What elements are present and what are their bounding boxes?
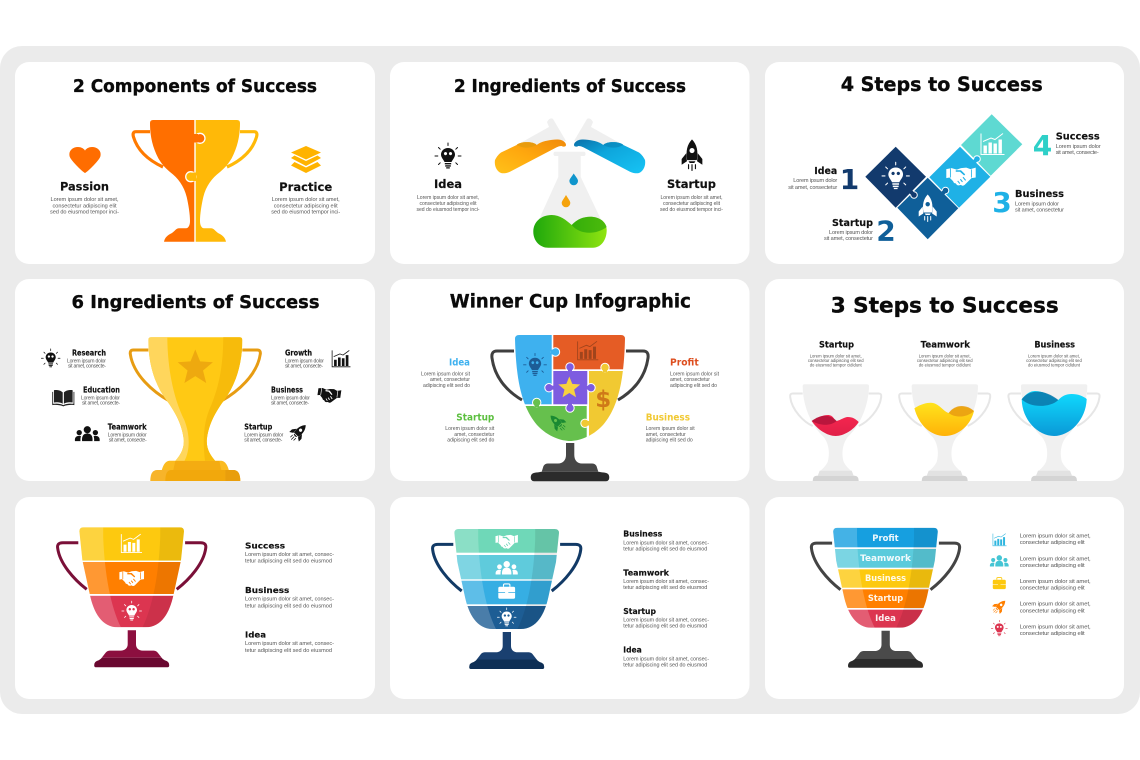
text block: Startup: Lorem ipsum dolor sit amet, bbox=[810, 353, 862, 358]
text block: Success: Lorem ipsum dolor bbox=[1056, 144, 1101, 150]
text block: Startup bbox=[808, 340, 864, 368]
text block: Growth: Growth bbox=[285, 349, 312, 358]
text block: Teamwork bbox=[917, 340, 973, 368]
text block: Teamwork: sit amet, consecte- bbox=[109, 438, 147, 444]
text block: Startup: consectetur adipiscing elit bbox=[663, 201, 721, 207]
text block: Business: tetur adipiscing elit sed do eiusmod bbox=[245, 603, 332, 609]
title: Winner Cup Infographic bbox=[450, 291, 691, 312]
text block: Startup: tetur adipiscing elit sed do eiusmod bbox=[623, 624, 707, 630]
band labels: Idea bbox=[875, 614, 896, 624]
step 3 diamond bbox=[929, 147, 990, 208]
text block: Idea: tetur adipiscing elit sed do eiusmod bbox=[245, 648, 332, 654]
band labels: Startup bbox=[868, 594, 904, 604]
text block: Success: sit amet, consecte- bbox=[1056, 150, 1099, 156]
text block: Startup: Startup bbox=[819, 340, 854, 350]
text block: Idea bbox=[788, 166, 837, 191]
text block: Research: Research bbox=[72, 349, 106, 358]
text block: Idea: adipiscing elit sed do bbox=[423, 383, 470, 389]
text block: Idea: Idea bbox=[814, 166, 837, 177]
text block: Practice bbox=[271, 180, 340, 216]
text list: Lorem ipsum dolor sit amet, bbox=[1020, 602, 1091, 608]
trophy: yellow, orange, red bands bbox=[58, 522, 206, 667]
text block: Business: Business bbox=[646, 413, 690, 424]
text block: Practice: sed do eiusmod tempor inci- bbox=[271, 210, 340, 216]
icon: rocket bbox=[919, 194, 937, 222]
text block: Business: Lorem ipsum dolor sit bbox=[646, 426, 695, 432]
text block: Business: Business bbox=[1034, 340, 1075, 350]
text block: Startup: Lorem ipsum dolor sit amet, bbox=[660, 195, 722, 201]
icon: briefcase bbox=[498, 584, 515, 599]
text block: Business: Business bbox=[245, 586, 290, 595]
text block: Startup: Startup bbox=[244, 422, 273, 431]
puzzle knobs bbox=[910, 156, 980, 198]
text block: Success: Lorem ipsum dolor sit amet, consec- bbox=[245, 552, 334, 558]
icon: bulb bbox=[524, 353, 546, 376]
panel: 3 Steps to Success bbox=[765, 279, 1124, 481]
text block: Startup: Lorem ipsum dolor sit amet, consec- bbox=[623, 618, 709, 624]
icon: rocket bbox=[990, 597, 1009, 616]
text block: Teamwork bbox=[623, 568, 709, 591]
icon: handshake bbox=[119, 571, 144, 586]
text block: Business bbox=[245, 586, 334, 609]
trophy: green, cyan, blue, navy bands bbox=[433, 524, 581, 669]
text block: Startup: do eiusmod tempor cididunt bbox=[810, 363, 863, 368]
text block: Growth: sit amet, consecte- bbox=[285, 364, 323, 370]
text block: Idea: sit amet, consectetur bbox=[788, 185, 837, 191]
text block: Practice: Practice bbox=[279, 180, 332, 194]
text block: Business: Lorem ipsum dolor bbox=[1015, 202, 1059, 208]
text block: Idea: Lorem ipsum dolor sit bbox=[421, 371, 471, 377]
icon: handshake bbox=[946, 168, 976, 186]
text block: Teamwork: Teamwork bbox=[108, 422, 148, 431]
text block: Growth: Lorem ipsum dolor bbox=[285, 359, 324, 365]
trophy: gold with star bbox=[130, 335, 260, 481]
band labels: Teamwork bbox=[860, 554, 912, 564]
panel: 4 Steps to Success bbox=[765, 62, 1124, 264]
text block: Success: tetur adipiscing elit sed do eiusmod bbox=[245, 559, 332, 565]
text block: Business: sit amet, consecte- bbox=[271, 401, 309, 407]
trophy: business blue level bbox=[1008, 384, 1100, 481]
text block: Passion: Passion bbox=[60, 180, 109, 194]
text block: Startup bbox=[660, 177, 723, 213]
text block: Education: Lorem ipsum dolor bbox=[81, 395, 120, 401]
text block: Profit: adipiscing elit sed do bbox=[670, 383, 717, 389]
icon: bulb bbox=[882, 162, 909, 189]
text block: Education: sit amet, consecte- bbox=[82, 401, 120, 407]
title: 2 Ingredients of Success bbox=[454, 76, 686, 97]
text block: Business: tetur adipiscing elit sed do eiusmod bbox=[623, 546, 707, 552]
text block: Idea: tetur adipiscing elit sed do eiusmod bbox=[623, 662, 707, 668]
numbers: 1 bbox=[840, 163, 859, 196]
text block: Startup: Lorem ipsum dolor bbox=[829, 230, 873, 236]
text block: Teamwork: tetur adipiscing elit sed do eiusmod bbox=[623, 585, 707, 591]
icon: chart bbox=[121, 534, 142, 553]
text block: Practice: Lorem ipsum dolor sit amet, bbox=[272, 197, 340, 203]
text block: Business: sit amet, consectetur bbox=[1015, 208, 1064, 214]
text block: Idea: Lorem ipsum dolor bbox=[793, 178, 837, 184]
band labels: Business bbox=[865, 574, 906, 584]
text block: Idea: consectetur adipiscing elit bbox=[420, 201, 477, 207]
icon: bulb bbox=[991, 620, 1007, 636]
text block: Success: Success bbox=[245, 541, 285, 550]
text block: Teamwork: Teamwork bbox=[623, 568, 670, 577]
title: 4 Steps to Success bbox=[841, 73, 1043, 96]
text block: Startup: sed do eiusmod tempor inci- bbox=[660, 207, 723, 213]
panel: 2 Components of Success bbox=[15, 62, 375, 264]
text block: Business bbox=[1026, 340, 1083, 368]
icon: briefcase bbox=[993, 578, 1006, 589]
text block: Research: sit amet, consecte- bbox=[68, 364, 106, 370]
text list: consectetur adipiscing elit bbox=[1020, 586, 1085, 592]
icon: chart bbox=[993, 534, 1007, 546]
flask with liquid bbox=[533, 152, 607, 248]
text block: Startup: amet, consectetur bbox=[454, 432, 495, 438]
icon: rocket bbox=[546, 411, 569, 434]
numbers: 2 bbox=[876, 215, 896, 248]
text block: Startup: Startup bbox=[667, 177, 716, 191]
text list bbox=[1020, 534, 1091, 637]
text block: Business: Business bbox=[271, 386, 303, 395]
diagram: puzzle check mark bbox=[865, 114, 1022, 239]
text block: Idea: amet, consectetur bbox=[430, 377, 470, 383]
text block: Profit: Lorem ipsum dolor sit bbox=[670, 371, 720, 377]
icon: chart bbox=[578, 341, 598, 360]
text block: Startup bbox=[244, 422, 284, 444]
text block: Growth bbox=[285, 349, 324, 370]
text block: Teamwork bbox=[108, 422, 148, 444]
text block: Startup bbox=[824, 218, 873, 242]
icon: bulb bbox=[122, 601, 142, 621]
text block: Idea: Lorem ipsum dolor sit amet, consec- bbox=[245, 641, 334, 647]
trophy: five labelled bands bbox=[811, 523, 960, 668]
text block: Passion bbox=[50, 180, 119, 216]
test tube: blue bbox=[574, 118, 645, 173]
icon: star bbox=[558, 376, 580, 397]
text block: Idea: Lorem ipsum dolor sit amet, consec- bbox=[623, 656, 709, 662]
text block: Teamwork: consectetur adipiscing elit sed bbox=[917, 358, 973, 363]
step 1 diamond bbox=[865, 147, 926, 208]
text block: Business: amet, consectetur bbox=[646, 432, 686, 438]
text block: Business bbox=[1015, 189, 1064, 214]
text block: Teamwork: do eiusmod tempor cididunt bbox=[919, 363, 972, 368]
panel: 6 Ingredients of Success bbox=[15, 279, 375, 481]
text block: Idea: Idea bbox=[245, 631, 266, 640]
text list: Lorem ipsum dolor sit amet, bbox=[1020, 534, 1091, 540]
text block: Startup: sit amet, consecte- bbox=[244, 438, 283, 444]
text block: Startup: Lorem ipsum dolor bbox=[244, 432, 284, 438]
text block: Research bbox=[67, 349, 106, 370]
text block: Profit: Profit bbox=[670, 358, 699, 369]
icon: people bbox=[990, 555, 1009, 567]
text block: Research: Lorem ipsum dolor bbox=[67, 359, 106, 365]
text block: Business: Business bbox=[623, 530, 663, 539]
text block: Passion: sed do eiusmod tempor inci- bbox=[50, 210, 119, 216]
text block: Business: Lorem ipsum dolor sit amet, consec- bbox=[245, 597, 334, 603]
text list: consectetur adipiscing elit bbox=[1020, 631, 1085, 637]
panel: 2 Ingredients of Success bbox=[390, 62, 750, 264]
test tube: orange bbox=[495, 118, 566, 173]
icon: dollar: $ bbox=[595, 387, 611, 413]
text block: Business bbox=[646, 413, 695, 444]
text block: Idea bbox=[623, 646, 709, 668]
icon: layers bbox=[291, 146, 321, 173]
icon: blue and orange drops bbox=[562, 174, 578, 207]
text block: Startup: consectetur adipiscing elit sed bbox=[808, 358, 864, 363]
icon: chart bbox=[332, 350, 350, 367]
band labels: Profit bbox=[872, 534, 899, 544]
text block: Education: Education bbox=[83, 386, 120, 395]
title: 2 Components of Success bbox=[73, 76, 317, 97]
text block: Business: Lorem ipsum dolor sit amet, bbox=[1028, 353, 1080, 358]
numbers bbox=[840, 129, 1052, 248]
icon: people bbox=[496, 561, 518, 574]
text block: Passion: consectetur adipiscing elit bbox=[52, 203, 117, 209]
icon: handshake bbox=[317, 387, 341, 404]
text block: Startup: Startup bbox=[456, 413, 494, 424]
icon: handshake bbox=[496, 535, 518, 549]
text block: Idea bbox=[421, 358, 471, 389]
text block: Passion: Lorem ipsum dolor sit amet, bbox=[50, 197, 119, 203]
numbers: 4 bbox=[1033, 129, 1052, 162]
text block: Teamwork: Teamwork bbox=[921, 340, 970, 350]
text list: consectetur adipiscing elit bbox=[1020, 540, 1085, 546]
step 2 diamond bbox=[897, 178, 958, 239]
text block: Success bbox=[1056, 132, 1101, 156]
text block: Profit: amet, consectetur bbox=[670, 377, 710, 383]
text block: Startup: adipiscing elit sed do bbox=[447, 438, 494, 444]
text list: Lorem ipsum dolor sit amet, bbox=[1020, 579, 1091, 585]
panel: 3-level warm trophy bbox=[15, 497, 375, 699]
trophy: startup red level bbox=[790, 384, 881, 481]
trophy: puzzle cup bbox=[492, 333, 648, 481]
text block: Success bbox=[245, 541, 334, 565]
text block: Teamwork: Lorem ipsum dolor sit amet, bbox=[919, 353, 971, 358]
trophy split in two puzzle halves bbox=[133, 120, 257, 242]
icon: bulb bbox=[497, 608, 516, 626]
text block: Startup: sit amet, consectetur bbox=[824, 236, 873, 242]
text list: Lorem ipsum dolor sit amet, bbox=[1020, 556, 1091, 562]
text block: Startup: Startup bbox=[623, 607, 656, 616]
panel: 4-level cool trophy bbox=[390, 497, 750, 699]
text list: Lorem ipsum dolor sit amet, bbox=[1020, 624, 1091, 630]
text block: Idea: Idea bbox=[623, 646, 642, 655]
text block: Practice: consectetur adipiscing elit bbox=[274, 203, 338, 209]
step 4 diamond bbox=[961, 114, 1022, 176]
text block: Business: consectetur adipiscing elit sed bbox=[1026, 358, 1083, 363]
text block: Idea bbox=[416, 177, 480, 213]
text block: Startup bbox=[445, 413, 495, 444]
text block: Idea bbox=[245, 631, 334, 654]
text block: Startup: Startup bbox=[832, 218, 873, 229]
text block: Idea: sed do eiusmod tempor inci- bbox=[416, 207, 480, 213]
text block: Idea: Idea bbox=[449, 358, 470, 369]
text block: Startup: Lorem ipsum dolor sit bbox=[445, 426, 495, 432]
panel: 5-level labelled trophy bbox=[765, 497, 1124, 699]
icon: chart bbox=[981, 134, 1004, 154]
text block: Idea: Idea bbox=[434, 177, 462, 191]
icon: research bulb bbox=[41, 349, 60, 367]
trophy: teamwork yellow level bbox=[899, 384, 990, 481]
icon: star bbox=[178, 350, 213, 383]
text block: Business bbox=[271, 386, 310, 407]
text block: Teamwork: Lorem ipsum dolor bbox=[108, 432, 147, 438]
text list: consectetur adipiscing elit bbox=[1020, 563, 1085, 569]
text block: Business: Lorem ipsum dolor bbox=[271, 395, 310, 401]
text block: Business bbox=[623, 530, 709, 552]
text block: Business: do eiusmod tempor cididunt bbox=[1028, 363, 1081, 368]
icon: heart bbox=[70, 148, 100, 172]
text block: Business: Lorem ipsum dolor sit amet, consec- bbox=[623, 540, 709, 546]
text block: Startup bbox=[623, 607, 709, 630]
icon: rocket bbox=[682, 139, 702, 170]
text block: Teamwork: Lorem ipsum dolor sit amet, consec- bbox=[623, 579, 709, 585]
icon: rocket bbox=[287, 420, 310, 444]
icon: book bbox=[52, 390, 74, 406]
numbers: 3 bbox=[992, 186, 1012, 219]
title: 6 Ingredients of Success bbox=[72, 292, 320, 313]
text block: Success: Success bbox=[1056, 132, 1100, 143]
text block: Profit bbox=[670, 358, 720, 389]
text block: Education bbox=[81, 386, 120, 407]
icon: idea bulb bbox=[435, 143, 461, 168]
title: 3 Steps to Success bbox=[831, 294, 1059, 319]
text block: Business: adipiscing elit sed do bbox=[646, 438, 693, 444]
text list: consectetur adipiscing elit bbox=[1020, 608, 1085, 614]
band labels bbox=[860, 534, 912, 624]
panel: Winner Cup Infographic bbox=[390, 279, 750, 481]
text block: Business: Business bbox=[1015, 189, 1064, 200]
text block: Idea: Lorem ipsum dolor sit amet, bbox=[417, 195, 479, 201]
icon: people bbox=[75, 426, 100, 441]
